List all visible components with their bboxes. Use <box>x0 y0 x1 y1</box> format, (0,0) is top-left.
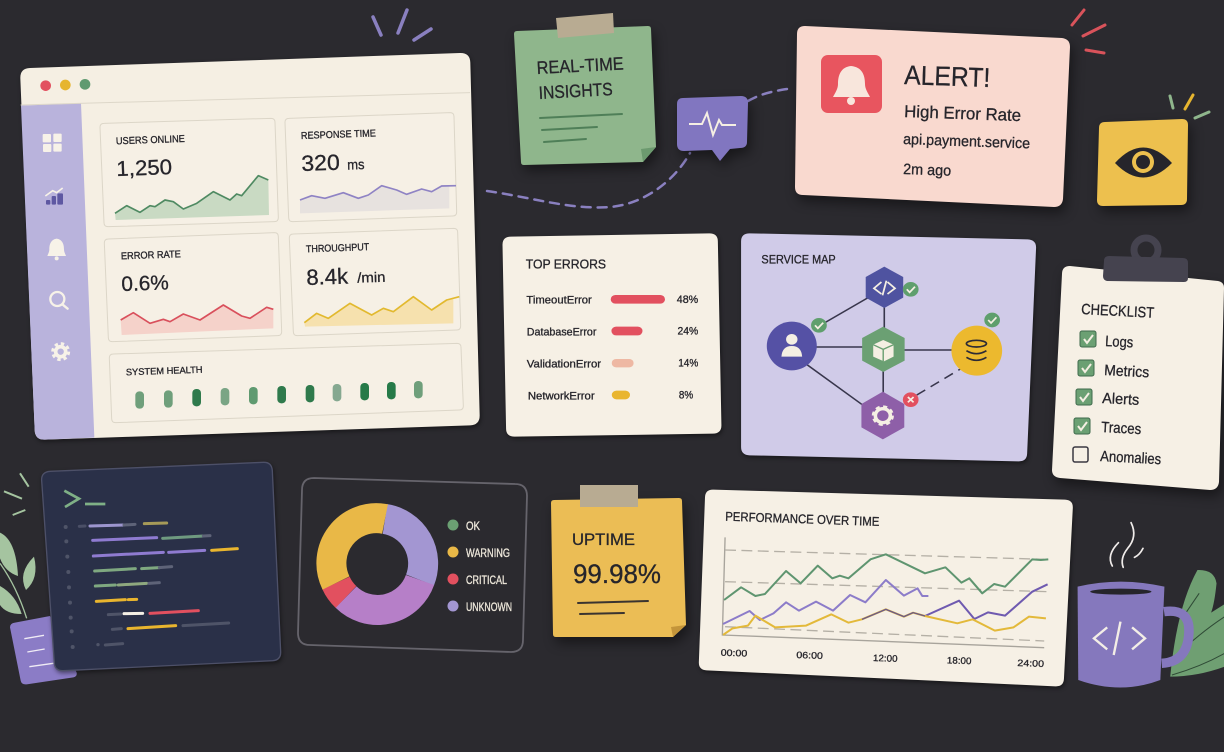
decorative sparks: eye <box>1170 95 1209 118</box>
alert card: ALERT! <box>904 60 991 93</box>
window body <box>20 53 480 440</box>
time axis labels: 18:00 <box>947 654 972 666</box>
node: user <box>767 322 817 370</box>
legend: CRITICAL <box>466 575 507 587</box>
clipboard clip <box>1103 238 1188 282</box>
row: TimeoutError: 48% <box>677 294 698 306</box>
plant leaves <box>1170 570 1224 677</box>
metric card: throughput: THROUGHPUT <box>306 242 369 255</box>
node: database <box>951 326 1002 376</box>
time axis labels <box>721 647 1044 669</box>
line: yellow series <box>723 609 1046 635</box>
panel: status donut chart <box>298 478 527 652</box>
metric card: response time: RESPONSE TIME <box>301 128 376 142</box>
mug body <box>1078 582 1164 687</box>
system health strip: SYSTEM HEALTH <box>126 365 203 377</box>
metric card: error rate: ERROR RATE <box>121 249 181 262</box>
row: NetworkError: 8% <box>679 390 693 402</box>
row: NetworkError: NetworkError <box>528 391 595 402</box>
item: traces <box>1074 418 1142 438</box>
chart axes and grid <box>722 537 1048 648</box>
item: anomalies <box>1073 447 1162 468</box>
panel: performance over time: PERFORMANCE OVER TIME <box>725 509 880 529</box>
tape <box>556 13 614 38</box>
icon: settings gear <box>53 344 69 360</box>
sticky note: uptime <box>551 485 686 637</box>
panel: checklist clipboard: CHECKLIST <box>1081 301 1155 322</box>
metric card: throughput <box>289 228 461 336</box>
sticky note: real-time insights <box>514 13 656 165</box>
row: ValidationError <box>527 358 698 370</box>
row: TimeoutError: TimeoutError <box>526 295 592 306</box>
alert card <box>795 26 1070 207</box>
line: green series <box>724 554 1048 600</box>
row: ValidationError: ValidationError <box>527 359 601 370</box>
coffee mug with leaves <box>1078 523 1224 687</box>
map links <box>806 297 961 407</box>
panel: service map: SERVICE MAP <box>761 253 836 266</box>
window control dots <box>40 79 90 91</box>
icon: chart <box>45 188 63 205</box>
line numbers <box>64 525 100 649</box>
row: NetworkError <box>528 390 693 402</box>
row: DatabaseError: DatabaseError <box>527 327 597 338</box>
terminal prompt <box>64 491 105 507</box>
item: alerts <box>1076 389 1140 409</box>
time axis labels: 00:00 <box>721 647 748 659</box>
legend: WARNING <box>466 548 510 560</box>
code lines <box>79 523 237 645</box>
panel: top errors: TOP ERRORS <box>526 256 606 271</box>
item: logs <box>1080 331 1134 351</box>
row: ValidationError: 14% <box>678 358 698 370</box>
alert card: High Error Rate <box>904 102 1021 125</box>
icon: dashboard grid <box>43 134 62 152</box>
panel: performance over time <box>699 490 1073 686</box>
panel: dashboard window <box>20 53 480 440</box>
legend <box>448 520 512 614</box>
steam <box>1110 523 1143 567</box>
system health strip <box>109 343 463 423</box>
tape <box>580 485 638 507</box>
item: metrics <box>1078 360 1150 381</box>
sticky note: uptime: UPTIME <box>572 530 635 549</box>
left plant with pot <box>0 473 77 684</box>
time axis labels: 12:00 <box>873 652 898 664</box>
note fold <box>641 147 656 162</box>
sticky note: real-time insights: INSIGHTS <box>538 79 613 103</box>
legend: OK <box>466 521 480 533</box>
sticky note: uptime: 99.98% <box>573 559 661 589</box>
icon card: eye <box>1097 119 1188 206</box>
status badges <box>811 282 1000 407</box>
icon: pulse speech bubble <box>677 96 748 161</box>
icon: search <box>50 292 68 309</box>
panel: code terminal <box>42 462 281 671</box>
node: code service <box>866 267 903 308</box>
item: anomalies: Anomalies <box>1100 448 1162 468</box>
icon: alert bell <box>821 55 882 113</box>
row: DatabaseError <box>527 326 698 338</box>
pot <box>10 616 77 684</box>
metric card: users online: USERS ONLINE <box>116 134 185 147</box>
node: package <box>862 327 905 372</box>
legend: UNKNOWN <box>466 602 512 614</box>
item: alerts: Alerts <box>1102 390 1140 409</box>
node: settings <box>861 392 904 439</box>
metric card: throughput: /min <box>357 269 386 286</box>
decorative sparks: above dashboard <box>373 10 431 40</box>
mug handle <box>1162 611 1189 663</box>
alert card: 2m ago <box>903 161 951 180</box>
time axis labels: 24:00 <box>1017 657 1044 669</box>
panel: top errors <box>502 233 721 437</box>
panel: service map <box>741 233 1036 461</box>
connector: dashed path <box>487 89 787 207</box>
item: logs: Logs <box>1105 333 1134 351</box>
item: metrics: Metrics <box>1104 362 1150 381</box>
donut <box>331 518 423 610</box>
line: purple series <box>723 580 1048 624</box>
time axis labels: 06:00 <box>796 649 823 661</box>
row: DatabaseError: 24% <box>677 326 698 338</box>
metric card: users online: 1,250 <box>116 155 173 181</box>
item: traces: Traces <box>1101 419 1142 438</box>
sidebar <box>21 103 94 440</box>
icon: bell <box>47 239 66 260</box>
metric card: response time: ms <box>347 156 365 173</box>
metric card: error rate <box>104 233 282 342</box>
alert card: api.payment.service <box>903 131 1030 152</box>
panel: checklist clipboard <box>1052 238 1224 490</box>
mug code icon <box>1094 622 1145 655</box>
decorative sparks: terminal <box>4 473 29 515</box>
row: TimeoutError <box>526 294 698 306</box>
sticky note: real-time insights: REAL-TIME <box>536 53 624 78</box>
plant leaves <box>0 533 36 614</box>
metric card: users online <box>100 118 278 227</box>
metric card: throughput: 8.4k <box>306 264 349 290</box>
metric card: response time <box>285 113 457 222</box>
note fold <box>671 625 686 637</box>
metric card: response time: 320 <box>301 150 340 176</box>
metric card: error rate: 0.6% <box>121 271 169 296</box>
decorative sparks: alert <box>1072 10 1105 53</box>
